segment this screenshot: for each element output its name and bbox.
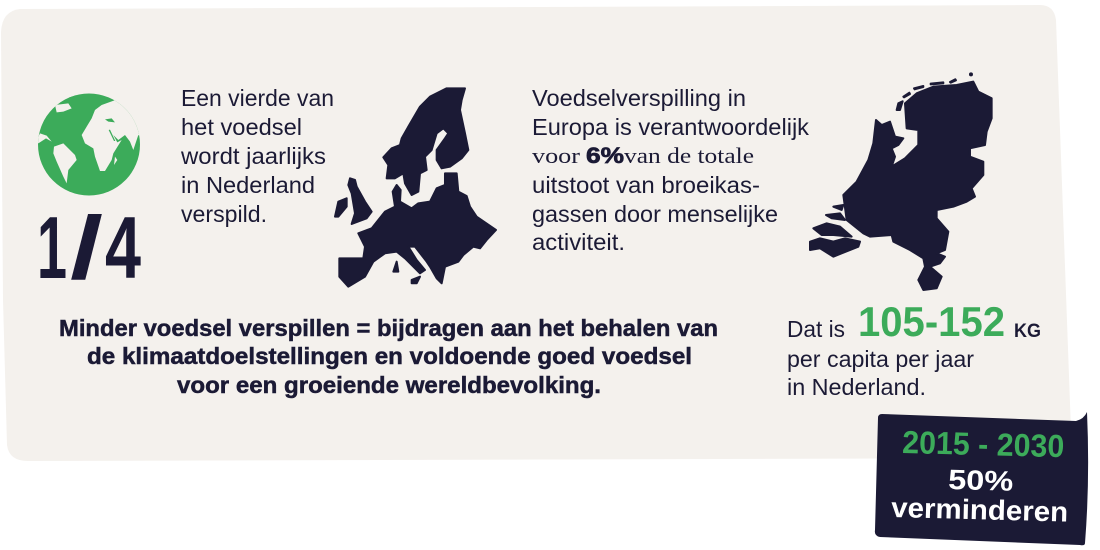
stat: kg per capita: 105-152 [858,298,1005,345]
headline statement [59,315,718,398]
big number: one quarter: / [70,198,103,297]
stat: kg per capita: KG [1014,321,1041,342]
stat: kg per capita: per capita per jaar [787,346,974,372]
text: one quarter wasted [180,85,334,227]
big number: one quarter: 4 [105,198,141,297]
text: Europe emissions: van de totale [624,143,754,168]
callout: 2015-2030 reduction [875,412,1088,545]
text: Europe emissions: gassen door menselijke [532,201,778,227]
headline statement: Minder voedsel verspillen = bijdragen aan het behalen van [59,315,718,341]
stat: kg per capita: Dat is [787,316,845,342]
callout: 2015-2030 reduction: verminderen [891,492,1069,528]
map: Netherlands [810,73,992,290]
text: Europe emissions: Europa is verantwoordelijk [532,114,810,140]
text: one quarter wasted: wordt jaarlijks [180,143,326,169]
headline statement: de klimaatdoelstellingen en voldoende goed voedsel [87,343,692,369]
stat: kg per capita [787,298,1041,400]
callout: 2015-2030 reduction: 50% [948,464,1014,497]
headline statement: voor een groeiende wereldbevolking. [177,372,601,398]
map: Europe [335,88,496,287]
text: Europe emissions: Voedselverspilling in [532,85,746,111]
callout: 2015-2030 reduction: 2015 - 2030 [902,424,1065,464]
text: one quarter wasted: verspild. [181,201,267,227]
stat: kg per capita: in Nederland. [787,374,926,400]
big number: one quarter [37,198,141,297]
text: Europe emissions: activiteit. [532,229,625,255]
text: Europe emissions: uitstoot van broeikas- [532,172,760,198]
text: one quarter wasted: in Nederland [181,172,315,198]
text: one quarter wasted: Een vierde van [181,85,334,111]
text: Europe emissions: 6% [586,143,624,168]
icon: green globe [37,92,147,196]
text: Europe emissions: voor [532,143,581,168]
big number: one quarter: 1 [37,198,67,297]
text: Europe emissions [532,85,810,255]
text: one quarter wasted: het voedsel [181,114,302,140]
